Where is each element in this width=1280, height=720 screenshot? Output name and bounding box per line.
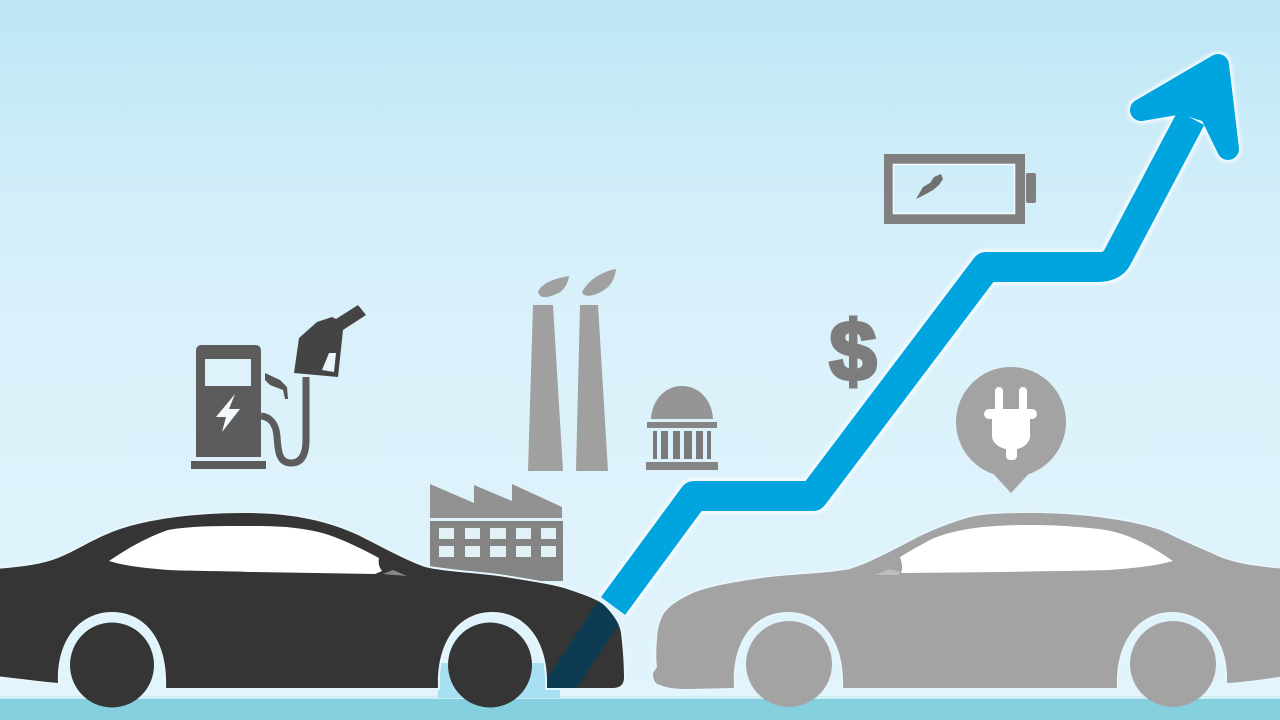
- arrow head: [1141, 65, 1228, 149]
- ground strip: [0, 696, 1280, 720]
- battery casing: [884, 154, 1025, 224]
- pump screen: [205, 359, 251, 386]
- factory windows: [439, 528, 556, 557]
- building base: [646, 462, 718, 470]
- icon: factory: [430, 484, 563, 581]
- rear wheel: [1130, 621, 1216, 707]
- left petrol car: [0, 513, 624, 708]
- nozzle: [294, 305, 366, 377]
- fuel drip: [265, 373, 288, 399]
- chimney right: [576, 305, 608, 471]
- rear wheel: [70, 622, 154, 708]
- chimney left: [528, 305, 563, 471]
- dome: [651, 386, 713, 419]
- wheel arch reflection: [438, 663, 560, 698]
- pump body: [196, 345, 261, 457]
- icon: government building: [646, 386, 718, 470]
- factory roof: [430, 484, 562, 518]
- arrow line: [613, 118, 1191, 606]
- lightning bolt: [216, 394, 240, 432]
- plug: [984, 387, 1037, 460]
- battery terminal: [1026, 173, 1036, 203]
- nozzle window: [322, 353, 336, 372]
- right electric car: [653, 513, 1280, 707]
- pump hose: [261, 377, 306, 463]
- icon: charging plug pin: [956, 367, 1066, 493]
- side mirror: [383, 570, 407, 576]
- pump base: [191, 461, 266, 469]
- arrow halo: [613, 65, 1228, 606]
- rising arrow: [613, 65, 1228, 606]
- front wheel: [448, 622, 532, 708]
- icon: power plant chimneys: [528, 269, 616, 471]
- side mirror: [875, 569, 900, 575]
- factory body: [430, 521, 563, 581]
- car body: [0, 513, 624, 688]
- smoke left: [538, 276, 569, 297]
- battery spark mark: [916, 174, 943, 199]
- icon: electric fuel pump: [191, 305, 366, 469]
- front wheel: [746, 621, 832, 707]
- columns: [653, 431, 711, 459]
- icon: low battery: [884, 154, 1036, 224]
- pin marker: [956, 367, 1066, 493]
- window: [109, 526, 382, 574]
- icon: dollar sign: $: [830, 304, 876, 398]
- car body: [653, 513, 1280, 689]
- entablature: [647, 422, 717, 428]
- battery inner outline: [894, 164, 1014, 214]
- smoke right: [582, 269, 616, 296]
- window: [900, 525, 1173, 573]
- arrow seen through bonnet: [556, 606, 613, 692]
